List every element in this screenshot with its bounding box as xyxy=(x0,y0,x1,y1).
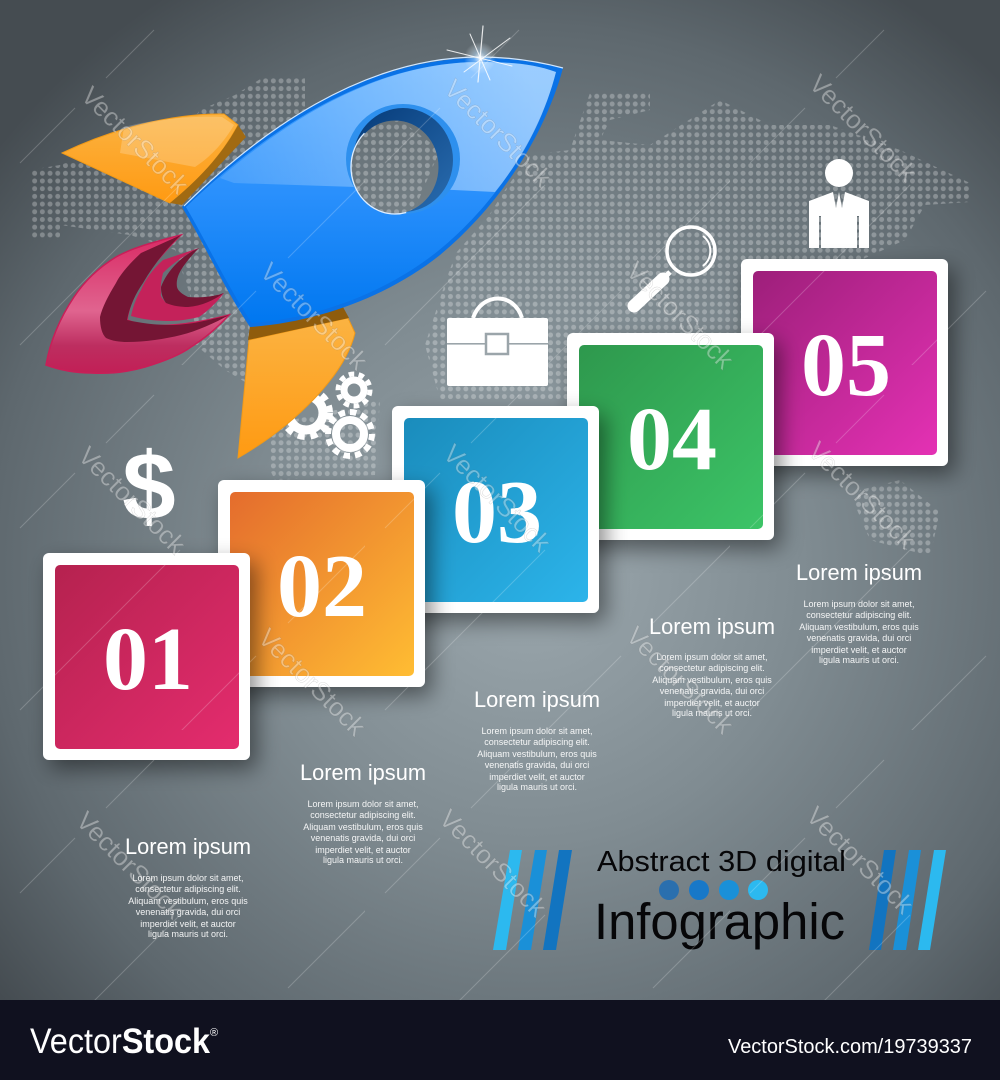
text block 4: venenatis gravida, dui orci xyxy=(660,686,764,696)
text block 1: ligula mauris ut orci. xyxy=(148,929,228,939)
step card 03: 03 xyxy=(452,463,542,562)
text block 1: imperdiet velit, et auctor xyxy=(140,919,236,929)
flame xyxy=(46,235,229,373)
watermark text: VectorStock xyxy=(70,805,190,925)
rocket body with window xyxy=(182,58,563,327)
title dots xyxy=(659,880,768,900)
step card 02: 02 xyxy=(277,537,367,636)
title: Infographic xyxy=(594,893,845,950)
watermark text: VectorStock xyxy=(254,256,374,376)
text block 2: Aliquam vestibulum, eros quis xyxy=(303,822,423,832)
text block 3: Aliquam vestibulum, eros quis xyxy=(477,749,597,759)
text block 3: Lorem ipsum xyxy=(474,687,600,712)
text block 1: venenatis gravida, dui orci xyxy=(136,907,240,917)
bottom fin xyxy=(238,307,355,458)
text block 5: imperdiet velit, et auctor xyxy=(811,645,907,655)
footer logo: VectorStock xyxy=(30,1022,210,1061)
step card 04 xyxy=(567,333,774,540)
text block 3: ligula mauris ut orci. xyxy=(497,782,577,792)
text block 3 xyxy=(474,687,600,792)
text block 2 xyxy=(300,760,426,865)
step card 05: 05 xyxy=(801,316,891,415)
text block 5: Lorem ipsum dolor sit amet, xyxy=(803,599,915,609)
text block 4: consectetur adipiscing elit. xyxy=(659,663,765,673)
text block 2: venenatis gravida, dui orci xyxy=(311,833,415,843)
step card 01: 01 xyxy=(103,610,193,709)
watermark text: VectorStock xyxy=(800,800,920,920)
rocket illustration xyxy=(46,26,563,458)
left blue stripes xyxy=(493,850,572,950)
step card 01 xyxy=(43,553,250,760)
footer url: VectorStock.com/19739337 xyxy=(728,1036,972,1058)
text block 4 xyxy=(649,614,775,718)
text block 3: venenatis gravida, dui orci xyxy=(485,760,589,770)
top fin xyxy=(62,114,246,205)
icon: dollar: $ xyxy=(122,433,176,540)
watermark text: VectorStock xyxy=(803,68,923,188)
title xyxy=(594,846,846,950)
text block 5: venenatis gravida, dui orci xyxy=(807,633,911,643)
text block 4: ligula mauris ut orci. xyxy=(672,708,752,718)
text block 1: Lorem ipsum dolor sit amet, xyxy=(132,873,244,883)
watermark text: VectorStock xyxy=(75,80,195,200)
text block 4: Aliquam vestibulum, eros quis xyxy=(652,675,772,685)
text block 2: Lorem ipsum dolor sit amet, xyxy=(307,799,419,809)
text block 4: Lorem ipsum dolor sit amet, xyxy=(656,652,768,662)
footer bar xyxy=(0,1000,1000,1080)
icon: briefcase xyxy=(447,298,548,386)
registered mark: ® xyxy=(210,1027,218,1039)
icon: businessman xyxy=(809,159,869,248)
text block 5 xyxy=(796,560,922,665)
text block 2: imperdiet velit, et auctor xyxy=(315,845,411,855)
text block 1: Aliquam vestibulum, eros quis xyxy=(128,896,248,906)
watermark text: VectorStock xyxy=(433,803,553,923)
icon: gears xyxy=(282,374,372,456)
text block 5: ligula mauris ut orci. xyxy=(819,655,899,665)
watermark text xyxy=(70,68,923,925)
window rim xyxy=(351,120,439,214)
text block 3: Lorem ipsum dolor sit amet, xyxy=(481,726,593,736)
text block 2: ligula mauris ut orci. xyxy=(323,855,403,865)
watermark text: VectorStock xyxy=(437,438,557,558)
right blue stripes xyxy=(869,850,946,950)
text block 3: consectetur adipiscing elit. xyxy=(484,737,590,747)
text block 4: Lorem ipsum xyxy=(649,614,775,639)
watermark text: VectorStock xyxy=(252,622,372,742)
step card 04: 04 xyxy=(627,390,717,489)
text block 5: Lorem ipsum xyxy=(796,560,922,585)
step card 05 xyxy=(741,259,948,466)
watermark text: VectorStock xyxy=(620,620,740,740)
watermark text: VectorStock xyxy=(72,440,192,560)
dotted world map xyxy=(32,78,969,553)
star sparkle xyxy=(447,26,512,82)
watermark text: VectorStock xyxy=(620,255,740,375)
text block 2: consectetur adipiscing elit. xyxy=(310,810,416,820)
highlight line xyxy=(184,57,563,206)
step card 03 xyxy=(392,406,599,613)
text block 1: consectetur adipiscing elit. xyxy=(135,884,241,894)
text block 1: Lorem ipsum xyxy=(125,834,251,859)
text block 2: Lorem ipsum xyxy=(300,760,426,785)
watermark text: VectorStock xyxy=(802,435,922,555)
icon: magnifier xyxy=(634,227,715,306)
title: Abstract 3D digital xyxy=(597,846,846,878)
text block 1 xyxy=(125,834,251,939)
text block 5: Aliquam vestibulum, eros quis xyxy=(799,622,919,632)
text block 5: consectetur adipiscing elit. xyxy=(806,610,912,620)
watermark text: VectorStock xyxy=(438,73,558,193)
step card 02 xyxy=(218,480,425,687)
text block 4: imperdiet velit, et auctor xyxy=(664,698,760,708)
text block 3: imperdiet velit, et auctor xyxy=(489,772,585,782)
